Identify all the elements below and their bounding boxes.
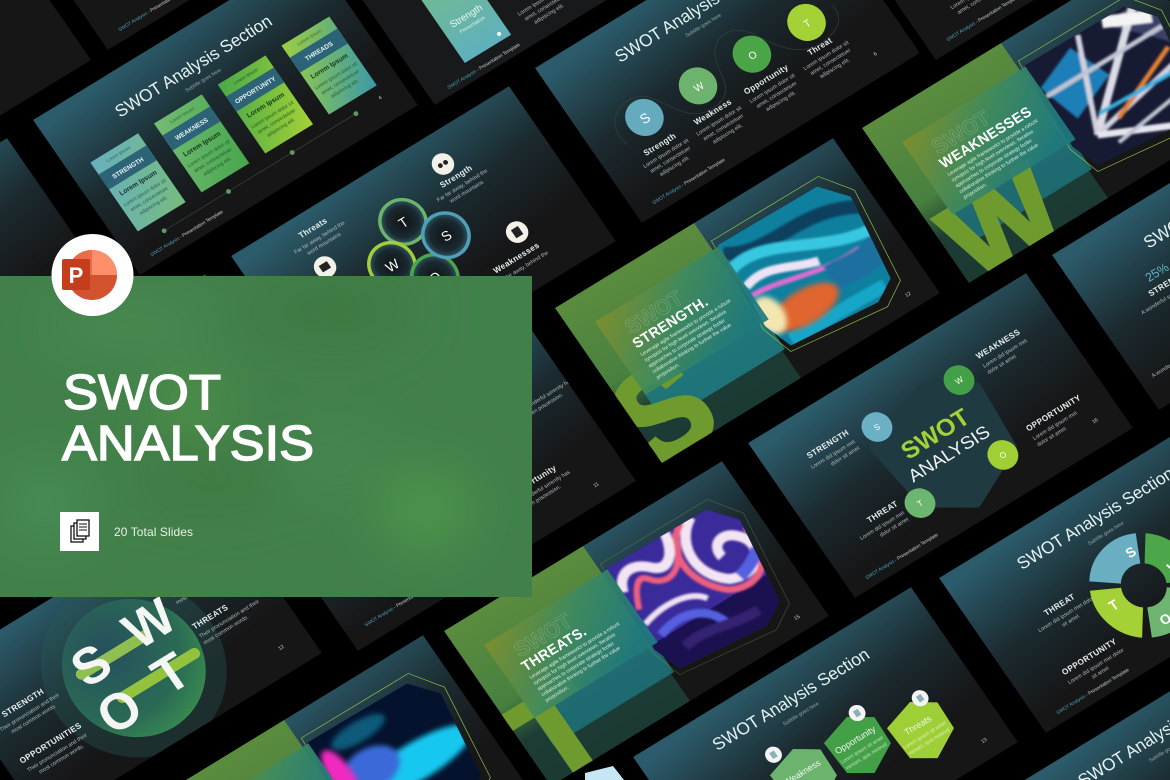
center title xyxy=(889,399,994,486)
footer: SWOT Analysis - Presentation Template xyxy=(363,579,439,628)
node: W xyxy=(938,360,981,401)
icon: PowerPoint logo: P xyxy=(69,263,83,288)
subtitle: Subtitle goes here xyxy=(184,67,223,94)
card: strength tall: Strength xyxy=(448,3,485,31)
step: W: adipiscing elit. xyxy=(712,122,745,145)
label: strength: Their pronunciation and their xyxy=(0,692,61,733)
green bars xyxy=(81,620,195,708)
abstract image: neon xyxy=(295,662,508,780)
label: strength: Strength xyxy=(438,163,474,190)
step: T: adipiscing elit. xyxy=(819,57,852,80)
letters SWOT xyxy=(52,586,220,745)
card: threats: Lorem Ipsum xyxy=(309,53,350,81)
outer halo circle xyxy=(5,545,263,780)
slide: opportunity neon image xyxy=(145,635,530,780)
slide title: SWOT Analysis Section xyxy=(708,644,873,754)
glass panel with text: Leverage agile frameworks to provide a robust xyxy=(639,298,733,358)
card: threats: Lorem ipsum dolor sit xyxy=(314,61,359,91)
slides count: 20 Total Slides xyxy=(114,525,193,539)
hexagon: threats: veniam, quis nostrud xyxy=(908,727,951,757)
label: threats: Far far away, behind the xyxy=(293,220,346,256)
glass panel with text xyxy=(484,569,658,718)
glass panel with text: collaborative thinking to further the value xyxy=(540,645,622,698)
slide: SWOT hexagon section xyxy=(633,587,1018,780)
light card xyxy=(585,766,624,780)
puzzle wheel: T xyxy=(1106,597,1122,614)
step: W: Lorem ipsum dolor sit xyxy=(695,105,744,137)
label: threats: Their pronunciation and their xyxy=(198,599,261,640)
banner texture xyxy=(11,282,467,546)
banner title: SWOT xyxy=(63,366,221,420)
center title: ANALYSIS xyxy=(904,422,994,486)
label: opportunity: Opportunity xyxy=(510,463,558,497)
icon: threats xyxy=(314,256,336,276)
step: O: Opportunity xyxy=(742,63,790,96)
footer: SWOT Analysis - Presentation Template xyxy=(651,157,727,206)
wave line xyxy=(614,4,839,144)
center title: SWOT xyxy=(896,404,976,465)
hexagon: opportunity xyxy=(818,705,902,780)
card: threats: adipiscing elit. xyxy=(330,78,360,100)
ring: T xyxy=(378,198,428,246)
step: S: amet, consectetuer xyxy=(649,146,692,175)
step: S: Lorem ipsum dolor sit xyxy=(642,138,691,170)
letters SWOT: S xyxy=(60,632,122,698)
lime outline xyxy=(705,164,921,367)
big letter W: W xyxy=(919,141,1087,307)
label: opportunities: most common words. xyxy=(38,743,86,775)
node: T: T xyxy=(916,499,925,509)
page number: 13 xyxy=(980,737,989,745)
footer: SWOT Analysis - Presentation Template xyxy=(864,532,940,581)
icon: documents xyxy=(60,512,99,551)
label: threat: Lorem did ipsum met xyxy=(859,510,906,542)
glass panel with text: synopsis for high level overviews. Iterative xyxy=(643,309,728,364)
glass panel with text: SWOT xyxy=(509,609,577,662)
slide: bottom right section xyxy=(1000,625,1170,780)
label: opportunity xyxy=(1059,636,1130,692)
glass panel with text xyxy=(902,66,1076,215)
node: T xyxy=(899,483,941,524)
subtitle: Subtitle goes here xyxy=(684,13,723,39)
page number: 15 xyxy=(793,614,802,622)
label: threat: THREAT xyxy=(1042,592,1077,618)
label: strength: most common words. xyxy=(10,703,58,735)
label: strength xyxy=(0,681,65,740)
node: S xyxy=(856,407,898,447)
puzzle wheel xyxy=(1070,515,1170,655)
label: strength: Far far away, behind the xyxy=(436,168,489,204)
description: adipiscing elit. xyxy=(533,3,566,26)
slide: strength card top xyxy=(362,0,606,104)
big letter S: S xyxy=(584,330,742,496)
label: weakness xyxy=(163,548,237,606)
label: opportunity: OPPORTUNITY xyxy=(1024,393,1083,433)
step: O: amet, consectetuer xyxy=(756,81,798,110)
label: strength: Lorem did ipsum met xyxy=(810,439,857,471)
label: opportunity: Lorem did ipsum met xyxy=(1032,410,1079,442)
glass panel with text: synopsis for high level overviews. Iterative xyxy=(950,129,1035,184)
glass panel with text: Leverage agile frameworks to provide a robust xyxy=(946,118,1040,178)
label: opportunity: A wonderful serenity has xyxy=(518,470,572,506)
card: weakness: Lorem Ipsum xyxy=(169,106,196,125)
glass panel with text: proposition. xyxy=(544,685,570,704)
label: threat: sit amet xyxy=(1061,613,1081,629)
slide: SWOT wave timeline xyxy=(535,0,920,223)
step: W: W xyxy=(692,81,707,95)
glass panel with text: collaborative thinking to further the value xyxy=(958,142,1040,195)
card: weakness xyxy=(154,94,249,192)
label: opportunities xyxy=(18,721,94,780)
step: T: T xyxy=(802,18,814,31)
icon: threats xyxy=(908,687,932,709)
main circle xyxy=(34,573,234,763)
label: weakness: Their pronunciation and their xyxy=(171,559,233,600)
label: threats: Threats xyxy=(297,216,329,240)
hexagon: weakness xyxy=(764,737,848,780)
card: threats: THREADS xyxy=(304,40,335,63)
green panel xyxy=(555,223,801,463)
card: opportunity: Lorem ipsum dolor sit xyxy=(250,100,296,130)
ring: S xyxy=(421,211,471,260)
lower glass xyxy=(533,642,674,746)
slide: top left dark slide xyxy=(0,0,91,230)
card: weakness: adipiscing elit. xyxy=(202,156,233,178)
hexagon: threats: Threats xyxy=(902,713,934,737)
label: strength: STRENGTH xyxy=(805,428,851,460)
label: threat: Lorem did ipsum met dolor xyxy=(1037,595,1096,634)
letters SWOT: O xyxy=(86,676,153,745)
upper description: A wonderful serenity has xyxy=(520,378,574,413)
green panel xyxy=(444,546,690,780)
timeline xyxy=(161,110,359,234)
card: opportunity xyxy=(218,55,313,153)
abstract image: fluid teal xyxy=(704,163,921,366)
upper description: taken possession. xyxy=(524,392,565,420)
banner xyxy=(0,276,532,597)
glass panel with text: Leverage agile frameworks to provide a robust xyxy=(528,621,622,681)
label: threat xyxy=(1030,584,1100,640)
lower glass xyxy=(951,139,1092,243)
hexagon: opportunity: Opportunity xyxy=(833,724,878,756)
label: weakness: Lorem did ipsum met xyxy=(982,338,1029,370)
hexagon: threats: Lorem ipsum sit amet xyxy=(903,720,948,751)
slide: threats image xyxy=(442,461,849,780)
card: opportunity: Lorem Ipsum xyxy=(246,92,286,120)
step: S: Strength xyxy=(642,131,678,158)
node: W: W xyxy=(954,375,965,386)
step: W xyxy=(678,67,743,144)
label: threat xyxy=(851,499,911,548)
label: opportunity: Lorem did ipsum met dolor xyxy=(1067,647,1125,686)
letters SWOT: T xyxy=(141,641,201,705)
icon: weaknesses xyxy=(506,221,528,243)
green panel xyxy=(145,720,391,780)
label: strength: word mountains xyxy=(448,180,485,205)
lime outline xyxy=(295,661,511,780)
card: weakness: Lorem ipsum dolor sit xyxy=(186,139,232,169)
slide: opportunity text (under banner) xyxy=(251,323,640,651)
page number: 16 xyxy=(1091,417,1100,425)
glass panel with text: collaborative thinking to further the value xyxy=(651,322,733,375)
slide: SWOT section with four cards xyxy=(33,0,418,275)
node: S: S xyxy=(872,422,883,433)
slide: bottom centre slide xyxy=(329,775,714,780)
glass panel with text: approaches to corporate strategy foster xyxy=(536,641,616,692)
ring: O: O xyxy=(427,269,445,287)
glass panel with text: synopsis for high level overviews. Iterative xyxy=(532,632,617,687)
page number: 12 xyxy=(277,644,286,652)
card: strength: Lorem Ipsum xyxy=(118,169,159,197)
step: O: adipiscing elit. xyxy=(765,90,798,113)
card: weakness: amet, consectetuer xyxy=(193,147,234,174)
green panel xyxy=(862,43,1108,283)
slide: strength image xyxy=(555,138,940,463)
glass panel with text xyxy=(185,743,359,780)
slide: left hidden teal slide xyxy=(0,274,312,599)
slide: top right dark slide xyxy=(895,0,1034,60)
abstract image: purple swirl xyxy=(594,488,807,688)
label: opportunity: dolor sit amet xyxy=(1036,426,1068,448)
footer: SWOT Analysis - Presentation Template xyxy=(446,42,522,91)
node: O: O xyxy=(998,450,1009,461)
card: strength: adipiscing elit. xyxy=(139,195,169,217)
glass panel with text: STRENGTH. xyxy=(630,294,712,352)
hexagon: opportunity: Lorem ipsum sit amet xyxy=(840,735,885,766)
card: threats: Lorem Ipsum xyxy=(296,28,323,47)
card: threats xyxy=(281,16,377,115)
step: S: adipiscing elit. xyxy=(659,155,692,178)
label: threats xyxy=(191,588,265,646)
step: T xyxy=(787,4,850,78)
step: S xyxy=(625,98,690,176)
slide: top dark slide with footer xyxy=(74,0,189,50)
lime outline xyxy=(594,487,810,690)
label: threat: dolor sit amet xyxy=(879,516,911,539)
step: S: S xyxy=(637,110,653,127)
card: weakness: WEAKNESS xyxy=(174,117,210,142)
footer: SWOT Analysis - Presentation Template xyxy=(149,209,225,258)
step: T: Lorem ipsum dolor sit xyxy=(803,40,851,72)
banner title: ANALYSIS xyxy=(62,417,314,471)
label: weakness: WEAKNESS xyxy=(974,327,1022,361)
card: opportunity: OPPORTUNITY xyxy=(234,75,278,106)
card: opportunity: amet, consectetuer xyxy=(257,108,297,135)
slide: left edge teal slide xyxy=(0,138,114,463)
label: opportunities: Their pronunciation and their xyxy=(26,733,89,774)
slide: SWOT hexagon center xyxy=(748,273,1133,598)
ring: W: W xyxy=(383,256,402,275)
slide: SWOT big circle xyxy=(0,498,326,780)
label: opportunity xyxy=(1024,393,1093,448)
label: weakness: most common words. xyxy=(175,574,223,606)
card: strength: STRENGTH xyxy=(111,156,146,181)
label: weaknesses: Weaknesses xyxy=(492,241,541,275)
icon: opportunity xyxy=(845,702,869,724)
step: T: Threat xyxy=(806,36,834,57)
glass panel with text: proposition. xyxy=(962,182,988,201)
label: weakness: WEAKNESS xyxy=(163,558,211,591)
card: strength: amet, consectetuer xyxy=(129,185,170,213)
glass panel with text xyxy=(595,246,769,395)
subtitle: Subtitle goes here xyxy=(782,701,820,727)
label: strength: dolor sit amet xyxy=(830,445,861,468)
step: O: O xyxy=(747,49,760,63)
label: strength xyxy=(802,428,861,477)
label: strength: STRENGTH xyxy=(0,687,46,719)
ring: S: S xyxy=(438,227,455,245)
label: weakness: dolor sit amet xyxy=(986,354,1018,376)
page number: 6 xyxy=(873,51,879,58)
slide: weaknesses image xyxy=(862,0,1170,311)
card: opportunity: adipiscing elit. xyxy=(266,117,297,139)
abstract image: crystal xyxy=(1012,0,1170,185)
label: opportunity: OPPORTUNITY xyxy=(1060,637,1119,677)
slide: SWOT puzzle wheel xyxy=(939,408,1170,733)
card: threats: amet, consectetuer xyxy=(320,69,361,96)
hexagon: threats xyxy=(881,690,965,771)
card: strength: Lorem Ipsum xyxy=(105,145,132,164)
banner title xyxy=(62,366,314,471)
icon: strength xyxy=(432,153,454,175)
label: threats: word mountains xyxy=(305,232,343,257)
step: W: amet, consectetuer xyxy=(702,113,745,142)
glass panel with text: approaches to corporate strategy foster xyxy=(647,318,727,369)
glass panel with text: SWOT xyxy=(927,106,995,159)
card: weakness: Lorem Ipsum xyxy=(182,131,222,159)
footer: SWOT Analysis - Presentation Template xyxy=(1055,667,1131,716)
hexagon: opportunity: veniam, quis nostrud xyxy=(845,742,888,771)
card: strength tall: Presentation xyxy=(459,15,487,35)
slide title: SWOT Analysis Section xyxy=(111,11,276,121)
label: threats: THREATS xyxy=(191,603,230,631)
description xyxy=(950,0,981,14)
step: T: amet, consectetuer xyxy=(809,48,852,77)
puzzle wheel: S xyxy=(1123,544,1139,561)
glass panel with text: approaches to corporate strategy foster xyxy=(954,138,1034,189)
label: opportunity xyxy=(510,459,576,512)
label: opportunities: OPPORTUNITIES xyxy=(18,721,84,765)
lime outline xyxy=(1012,0,1170,187)
icon: weakness xyxy=(762,744,785,766)
step: W: Weakness xyxy=(692,97,734,127)
glass panel with text: SWOT xyxy=(620,286,688,339)
card: opportunity: Lorem Ipsum xyxy=(233,67,260,86)
label: threats: most common words. xyxy=(203,614,250,646)
icon: PowerPoint logo xyxy=(52,234,134,316)
label: threat: THREAT xyxy=(865,499,900,525)
hexagon xyxy=(859,364,1033,531)
ring: T: T xyxy=(396,214,412,231)
label: weakness xyxy=(974,327,1034,376)
card: strength: Lorem ipsum dolor sit xyxy=(123,178,168,208)
page number: 11 xyxy=(592,481,601,489)
slide: TSWO ring diagram xyxy=(231,86,616,292)
label: opportunity: sit amet xyxy=(1091,665,1111,681)
label: opportunity: taken possession. xyxy=(522,484,563,512)
letters SWOT: W xyxy=(112,586,186,660)
glass panel with text: THREATS. xyxy=(519,624,590,675)
slide: SWOT right percent xyxy=(1052,85,1170,410)
step: O xyxy=(732,36,796,111)
page number: 4 xyxy=(377,95,383,102)
ring: W xyxy=(367,240,416,276)
label: weaknesses: Far far away, behind the xyxy=(497,250,550,286)
ring: O xyxy=(410,253,460,276)
subtitle: Subtitle goes here xyxy=(1087,521,1125,547)
card: strength tall xyxy=(422,0,512,63)
card: strength xyxy=(90,133,186,231)
page number: 12 xyxy=(904,291,913,299)
glass panel with text: proposition. xyxy=(655,362,681,381)
step: O: Lorem ipsum dolor sit xyxy=(749,73,797,105)
lower glass xyxy=(644,319,785,423)
glass panel with text: WEAKNESSES xyxy=(937,104,1035,172)
node: O xyxy=(981,435,1024,475)
